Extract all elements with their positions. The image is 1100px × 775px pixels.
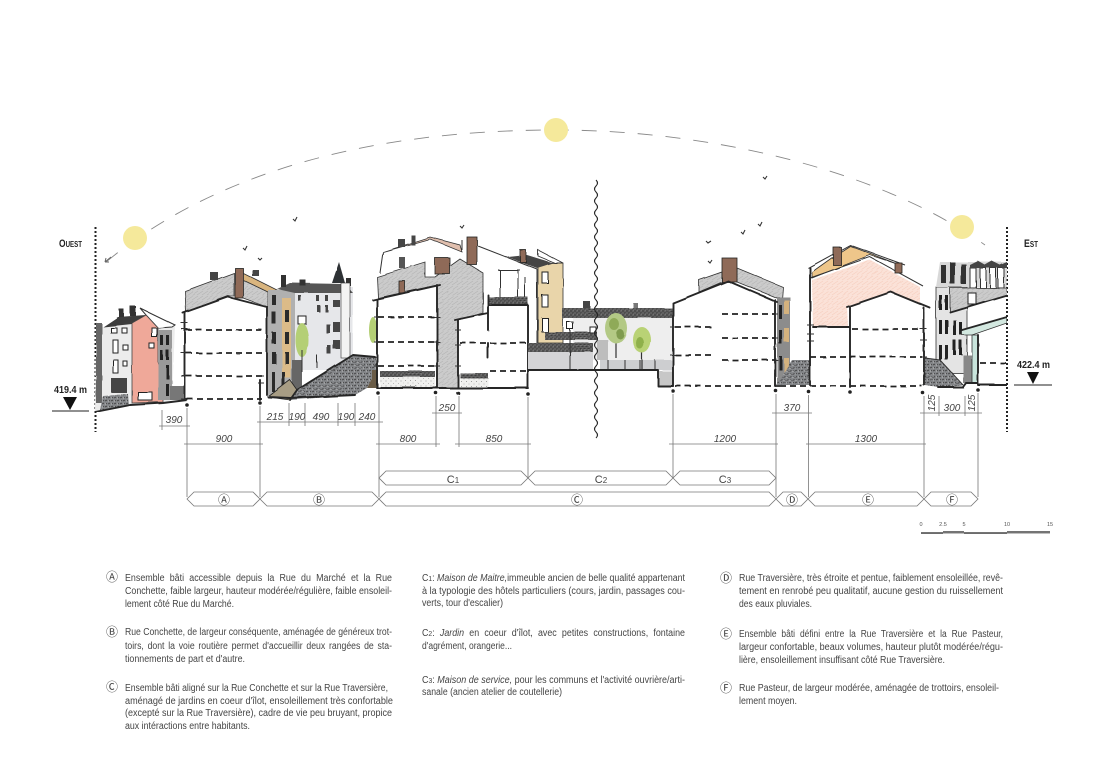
note C1: à la typologie des hôtels particuliers (cours, jardin, passages cou- [422,586,685,597]
sub-zones C1 C2 C3: C2 [595,474,608,486]
sun: morning [123,226,147,250]
dimension values: 490 [313,412,330,423]
sun path arc [105,130,985,262]
note C1: C1: Maison de Maitre,immeuble ancien de belle qualité appartenant [422,573,685,584]
sub-zones C1 C2 C3: C1 [447,474,460,486]
note C3 [422,675,685,698]
zones A to F: Ⓓ [786,493,798,507]
note D: des eaux pluviales. [739,599,812,610]
note C: aménagé de jardins en coeur d'îlot, ensoleillement très confortable [125,696,393,707]
note F: Ⓕ [720,681,732,695]
dimension values: 215 [266,412,284,423]
dimension values: 850 [486,434,503,445]
east level marker 422.4 m: 422.4 m [1017,359,1050,371]
note B: Rue Conchette, de largeur conséquente, aménagée de généreux trot- [125,627,392,638]
note F: Rue Pasteur, de largeur modérée, aménagée de trottoirs, ensoleil- [739,683,999,694]
note B: toirs, dont la voie routière permet d'accueillir deux rangées de sta- [125,641,392,652]
dimension values: 240 [358,412,376,423]
dimension values: 800 [400,434,417,445]
dimension values [166,394,978,445]
dimension values: 1300 [855,434,878,445]
note F: lement moyen. [739,696,797,707]
scale bar: 0 [919,522,923,528]
garden C2 [528,301,673,386]
note C2 [422,628,685,652]
note C1 [422,573,685,609]
note E [720,627,1003,666]
note C3: C3: Maison de service, pour les communs et l'activité ouvrière/arti- [422,675,685,686]
text column left [106,570,393,732]
street F and building [925,261,1007,387]
note D: tement en renrobé peu qualitatif, aucune gestion du ruissellement [739,586,1003,597]
sun: noon [544,118,568,142]
dimension values: 300 [944,403,961,414]
dimension values: 190 [338,412,355,423]
scale bar: 2.5 [939,522,947,528]
scale bar: 10 [1004,522,1010,528]
tree right [633,327,651,353]
section house C3 [670,258,790,386]
dimension values: 250 [438,403,456,414]
scale bar: 15 [1047,522,1053,528]
ground reference points [185,388,980,407]
label: Ouest: OUEST [59,238,82,250]
note B: tionnements de part et d'autre. [125,654,245,665]
street section drawing [95,235,1007,412]
zones A to F: Ⓒ [571,493,583,507]
note C2: d'agrément, orangerie... [422,641,512,652]
note E: largeur confortable, beaux volumes, hauteur plutôt modérée/régu- [739,642,1003,653]
zones A to F: Ⓐ [218,493,230,507]
west level marker 419.4 m: 419.4 m [54,384,87,396]
note A [106,570,392,610]
text column right [720,571,1003,707]
note F [720,681,999,707]
section cut wavy line [594,180,598,438]
dimension values: 125 [927,394,938,411]
dimension values: 370 [784,403,801,414]
note E: Ensemble bâti défini entre la Rue Traversière et la Rue Pasteur, [739,629,1003,640]
text column middle [422,573,685,698]
sun: evening [950,215,974,239]
scale bar: 5 [962,522,966,528]
note D [720,571,1003,610]
west level marker 419.4 m [52,384,89,411]
note A: lement côté Rue du Marché. [125,599,234,610]
note E: lière, ensoleillement insuffisant côté Rue Traversière. [739,655,945,666]
section house A [181,268,277,400]
note B: Ⓑ [106,625,118,639]
note C: aux intéractions entre habitants. [125,721,250,732]
birds [243,176,767,263]
dimension values: 900 [216,434,233,445]
zones A to F: Ⓑ [313,493,325,507]
building A elevation [95,306,187,412]
section house C1 [369,235,563,388]
east boundary dotted line [1006,227,1008,432]
note D: Ⓓ [720,571,732,585]
scale bar [919,522,1053,534]
note A: Ensemble bâti accessible depuis la Rue du Marché et la Rue [125,573,392,584]
note E: Ⓔ [720,627,732,641]
zones A to F [187,492,978,507]
dimension lines [159,393,982,497]
dimension values: 390 [166,415,183,426]
note C3: sanale (ancien atelier de coutellerie) [422,687,562,698]
dimension values: 190 [289,412,306,423]
note A: Ⓐ [106,570,118,584]
note C [106,680,393,732]
note C: (excepté sur la Rue Traversière), cadre de vie peu bruyant, propice [125,708,392,719]
note D: Rue Traversière, très étroite et pentue, faiblement ensoleillée, revê- [739,573,1003,584]
note C1: verts, tour d'escalier) [422,598,503,609]
dimension values: 125 [967,394,978,411]
street D [776,360,810,385]
zones A to F: Ⓕ [946,493,958,507]
note C: Ensemble bâti aligné sur la Rue Conchette et sur la Rue Traversière, [125,683,388,694]
note C: Ⓒ [106,680,118,694]
sub-zones C1 C2 C3 [379,471,776,486]
east level marker 422.4 m [1014,359,1052,385]
building B elevation [268,262,378,400]
section house E [780,245,930,387]
note A: Conchette, faible largeur, hauteur modérée/régulière, faible ensoleil- [125,586,392,597]
label: Est: EST [1024,238,1038,250]
note C2: C2: Jardin en coeur d'îlot, avec petites constructions, fontaine [422,628,685,639]
sub-zones C1 C2 C3: C3 [719,474,732,486]
zones A to F: Ⓔ [862,493,874,507]
west boundary dotted line [94,227,96,432]
dimension values: 1200 [714,434,737,445]
note B [106,625,392,665]
tree left [605,313,627,343]
